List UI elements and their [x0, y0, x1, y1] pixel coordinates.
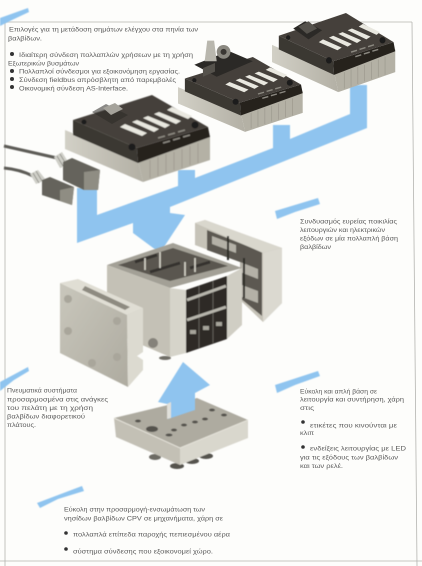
text block: easy integration	[64, 506, 230, 556]
brush mark: integration text	[37, 486, 84, 508]
text block: easy maintenance: για τις εξόδους των βαλβίδων	[300, 454, 399, 462]
module: middle valve terminal	[178, 41, 303, 132]
text block: easy maintenance: κλιπ	[300, 430, 314, 437]
text block: signal transmission options: Ιδιαίτερη σύνδεση πολλαπλών χρήσεων με τη χρήση	[19, 51, 193, 59]
text block: valve combinations	[300, 218, 398, 251]
text block: signal transmission options: βαλβίδων.	[8, 34, 42, 42]
text block: signal transmission options: Εξωτερικών βυσμάτων	[8, 60, 80, 68]
sensor cables and connectors	[4, 146, 100, 205]
brush mark: maintenance text	[275, 371, 320, 393]
text block: easy maintenance: ετικέτες που κινούνται με	[310, 422, 397, 430]
text block: valve combinations: εξόδων σε μία πολλαπλή βάση	[300, 234, 398, 242]
text block: signal transmission options: Επιλογές για τη μετάδοση σημάτων ελέγχου στα πηνία των	[9, 26, 199, 34]
text block: easy maintenance: και των ρελέ.	[300, 462, 343, 470]
text block: easy maintenance: Εύκολη και απλή βάση σε	[300, 388, 377, 396]
text block: easy integration: νησίδων βαλβίδων CPV σε μηχανήματα, χάρη σε	[64, 514, 223, 522]
text block: easy integration: σύστημα σύνδεσης που εξοικονομεί χώρο.	[73, 548, 213, 556]
text block: valve combinations: λειτουργιών και ηλεκτρικών	[300, 226, 386, 234]
text block: pneumatic systems: προσαρμοσμένα στις ανάγκες	[7, 396, 109, 404]
text block: pneumatic systems: Πνευματικά συστήματα	[7, 386, 77, 394]
text block: signal transmission options	[8, 26, 199, 92]
text block: easy integration: πολλαπλά επίπεδα παροχής πεπιεσμένου αέρα	[73, 530, 230, 538]
mounting base plate	[114, 398, 248, 469]
blue connection pipes and down arrow	[77, 85, 367, 253]
back sub-base plate	[195, 220, 282, 322]
text block: pneumatic systems	[7, 386, 109, 429]
text block: easy integration: Εύκολη στην προσαρμογή-ενσωμάτωση των	[64, 506, 206, 514]
text block: pneumatic systems: του πελάτη με τη χρήση	[7, 404, 93, 412]
front end plate	[60, 279, 143, 387]
brush mark: intro	[0, 8, 29, 26]
text block: signal transmission options: Οικονομική σύνδεση AS-Interface.	[19, 84, 128, 92]
text block: valve combinations: Συνδυασμός ευρείας ποικιλίας	[300, 218, 398, 226]
text block: easy maintenance	[300, 388, 406, 470]
text block: valve combinations: βαλβίδων	[300, 243, 332, 251]
module: right valve terminal	[272, 13, 395, 92]
central valve block	[107, 243, 242, 360]
text block: easy maintenance: ενδείξεις λειτουργίας με LED	[310, 444, 406, 452]
text block: easy maintenance: λειτουργία και συντήρηση, χάρη	[300, 396, 404, 404]
text block: signal transmission options: Σύνδεση fieldbus απρόσβλητη από παρεμβολές	[19, 76, 177, 84]
module: left valve terminal	[65, 95, 210, 182]
brush mark: combination text	[275, 198, 320, 219]
text block: easy maintenance: στις	[300, 405, 315, 412]
brush mark: pneumatic text	[0, 367, 29, 391]
text block: pneumatic systems: πλάτους.	[7, 421, 36, 429]
text block: pneumatic systems: βαλβίδων διαφορετικού	[7, 412, 85, 420]
up arrow	[158, 362, 210, 419]
text block: signal transmission options: Πολλαπλοί σύνδεσμοι για εξοικονόμηση εργασίας.	[19, 68, 180, 76]
exploded valve assembly	[60, 220, 282, 387]
